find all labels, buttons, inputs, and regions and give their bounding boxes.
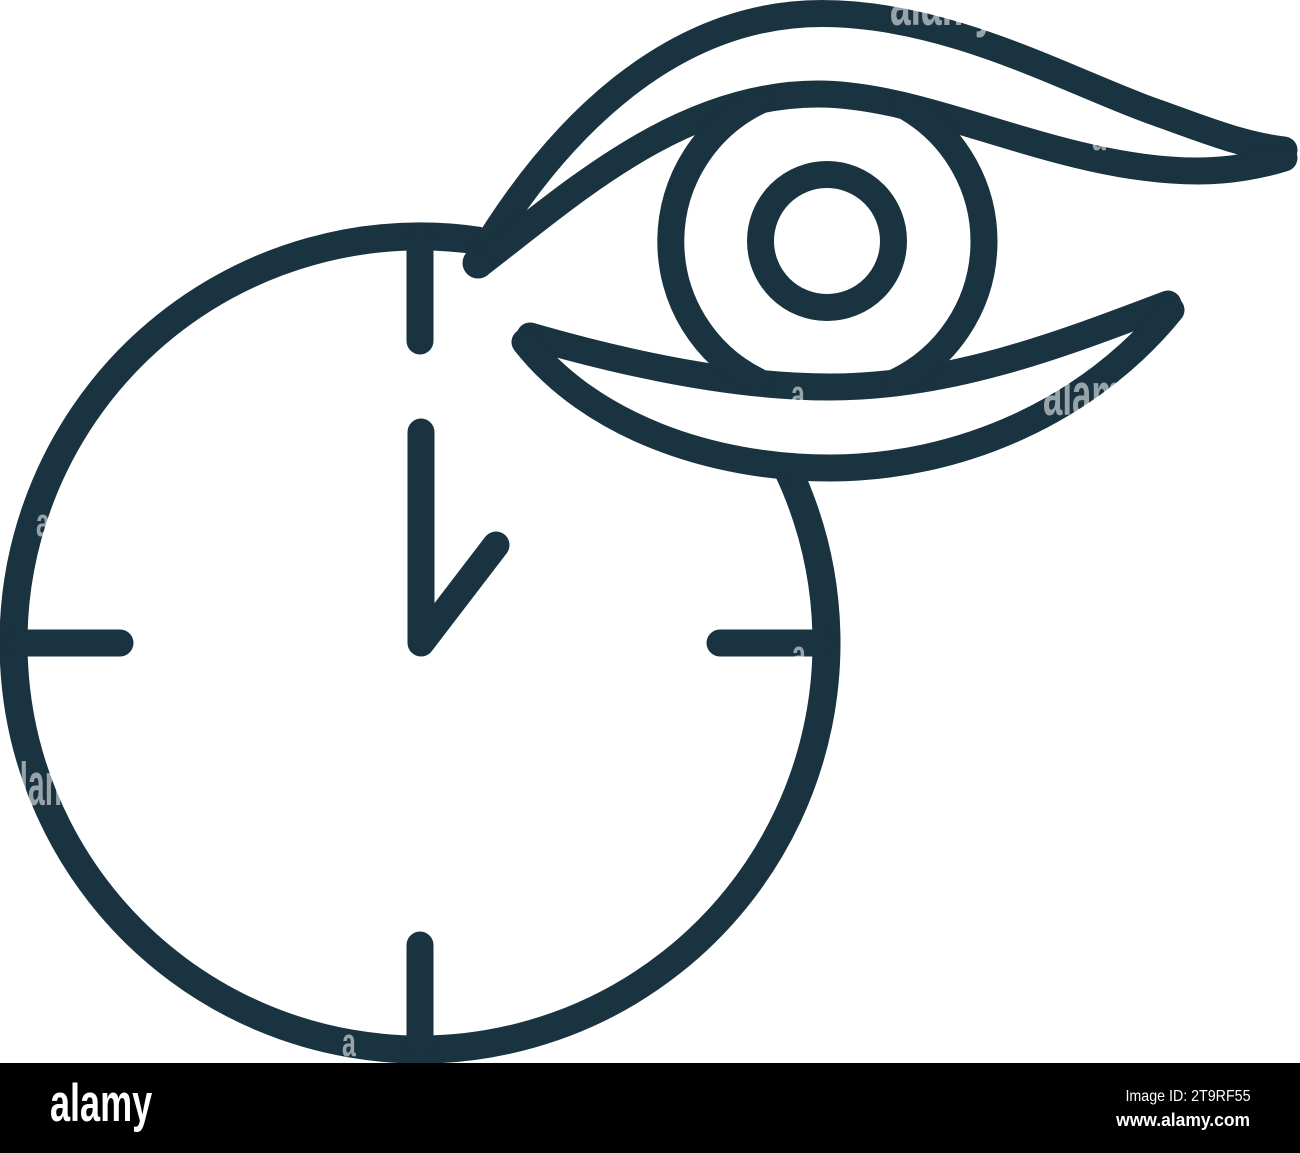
eyebrow crease (477, 14, 1284, 262)
inner corner join (462, 248, 494, 278)
iris (671, 100, 984, 383)
image id: Image ID: 2T9RF55 (1125, 1088, 1250, 1105)
logo: alamy (50, 1074, 152, 1133)
image url: www.alamy.com (1116, 1110, 1250, 1130)
watermark text on strokes: a (1092, 115, 1106, 160)
lower eyelid top edge (530, 304, 1168, 387)
watermark text on strokes: alamy (1043, 362, 1142, 428)
watermark footer (0, 1063, 1300, 1153)
upper eyelid (481, 94, 1284, 263)
watermark text on strokes: a (36, 501, 50, 546)
clock outline (14, 236, 827, 1049)
watermark text on strokes: alamy (3, 752, 88, 819)
clock hands (421, 432, 496, 643)
clock ticks (20, 240, 820, 1046)
lower eyelid bottom edge (525, 310, 1171, 468)
watermark text on strokes: a (791, 373, 805, 418)
watermark text on strokes: a (792, 633, 806, 678)
pupil (760, 174, 894, 308)
